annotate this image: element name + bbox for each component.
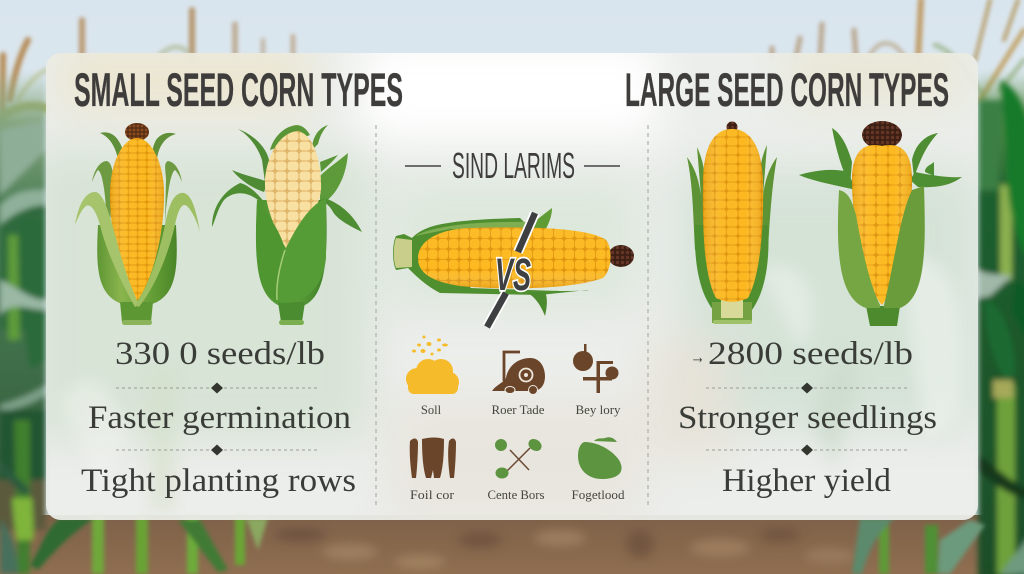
heading: small seed corn types: SMALL SEED CORN TYPES [74,63,403,116]
left stalks and leaves [0,70,46,574]
benefit: tight planting rows: Tight planting rows [81,463,356,499]
icon: crossed tools [495,436,544,478]
soil mottling [274,528,856,569]
label: cente bors: Cente Bors [488,488,545,502]
stat: seeds per lb: 2800 seeds/lb [708,336,913,372]
separator [116,382,320,394]
icon: three brown kernels [410,438,456,478]
center corn with VS slash [393,208,634,327]
label: soil: Soll [421,403,442,417]
left tassels [0,10,293,120]
separator [706,444,909,456]
label: roer tade: Roer Tade [492,403,545,417]
right stalks and leaves [978,70,1024,574]
icon: roller machine [492,352,545,394]
stat: seeds per lb: 330 0 seeds/lb [115,336,325,372]
right tassels [772,0,1024,100]
label: fogetlood: Fogetlood [572,488,625,502]
left stats text [81,336,356,499]
separator [116,444,320,456]
corn illustration: small seed golden ear [75,123,200,325]
stat: seeds per lb: → [690,347,705,368]
vs slash lower [487,293,506,327]
center heading: SIND LARIMS [452,145,575,186]
vs label: VS [495,249,531,300]
icon: branch with circles [573,344,618,393]
soil ground [0,515,1024,574]
label: foil cor: Foil cor [410,488,455,502]
divider: right column vertical [647,125,649,505]
vs slash upper [518,213,535,252]
benefit: faster germination: Faster germination [88,400,351,436]
corn illustration: large seed slim ear [687,122,777,324]
panel wash: soft field reflections [30,40,980,520]
bottom seedlings [30,515,985,574]
right stats text [678,336,937,499]
corn illustration: small seed pale ear [212,125,362,325]
benefit: higher yield: Higher yield [722,463,892,499]
panel wash: faint stalk shapes [60,256,962,510]
separator [706,382,909,394]
icon: green leaf blob [578,437,622,479]
panel: frosted card [30,40,980,520]
label: bey lory: Bey lory [576,403,621,417]
icon: soil pile [406,336,459,394]
divider: left column vertical [375,125,377,505]
benefit: stronger seedlings: Stronger seedlings [678,400,937,436]
corn illustration: large seed open ear [799,121,962,326]
